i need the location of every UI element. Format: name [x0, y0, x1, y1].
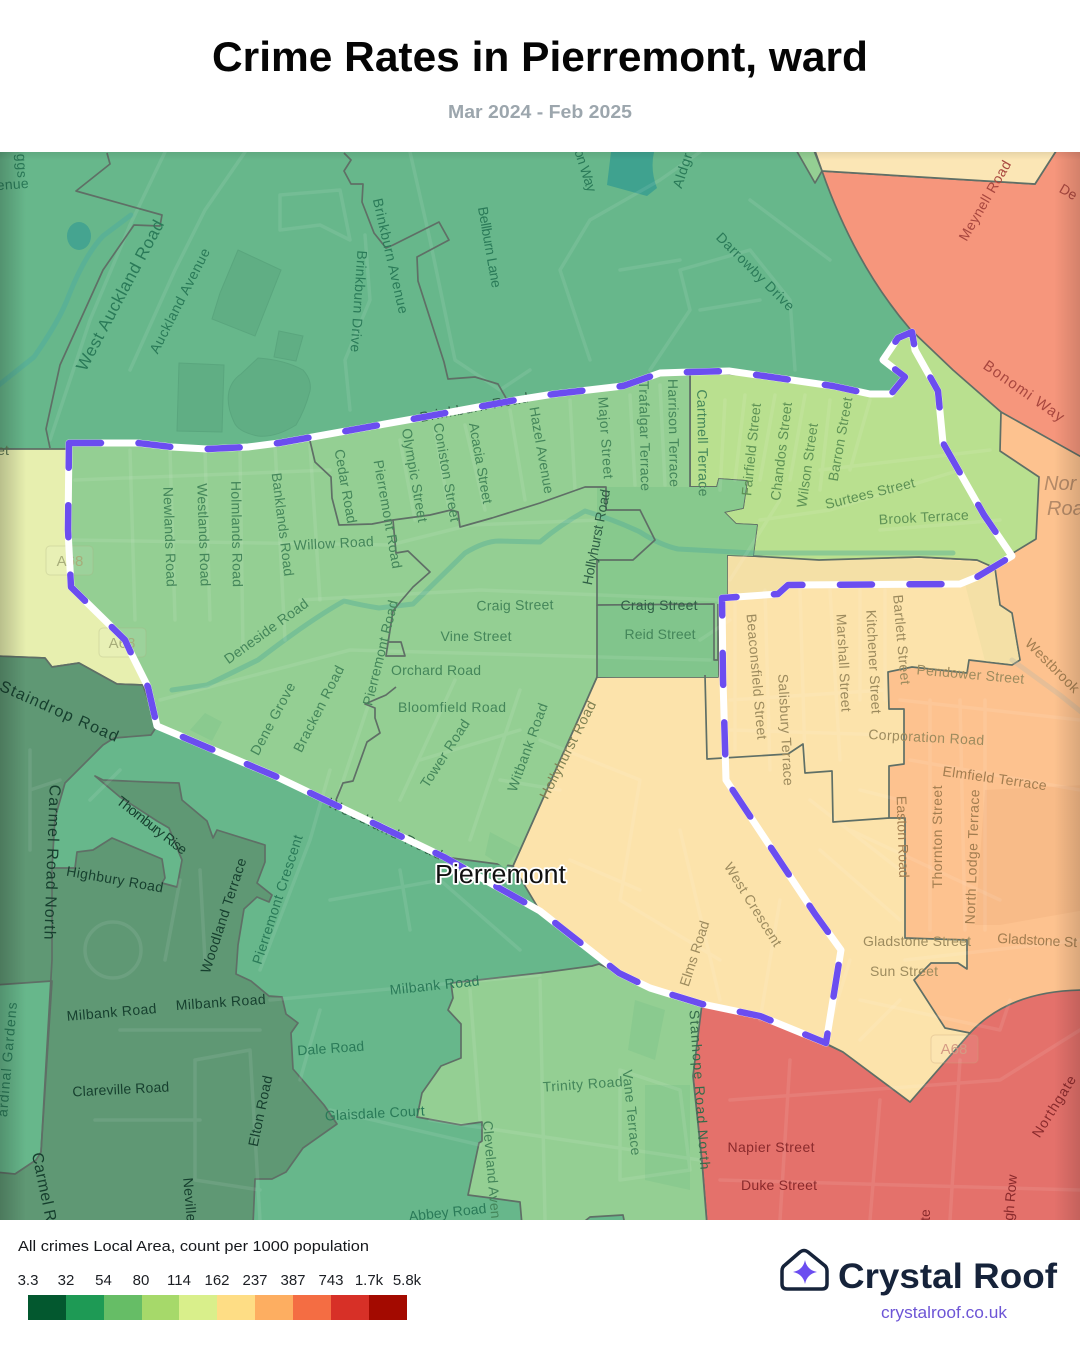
legend: scale labels: 114 [167, 1272, 191, 1289]
legend: scale labels: 162 [204, 1272, 230, 1289]
street labels: yellow zone: Gladstone Street [863, 933, 971, 949]
legend: scale labels: 743 [318, 1272, 344, 1289]
legend: scale labels: 32 [58, 1272, 74, 1289]
pond north [607, 152, 657, 196]
A68 road shields [46, 546, 978, 1063]
street labels: lighter green east [738, 396, 969, 527]
street network [30, 152, 1080, 1220]
street labels: yellow zone: Sun Street [870, 963, 938, 979]
street labels: lighter green east: Barron Street [825, 396, 855, 482]
street labels: ward light green: Cedar Road [332, 448, 360, 524]
street labels: lighter green east: Wilson Street [793, 422, 821, 509]
street labels: ward light green: Bracken Road [290, 663, 347, 755]
street labels: dark green zone: Milbank Road [175, 991, 266, 1013]
street labels: ward light green: Craig Street [476, 596, 554, 614]
street labels: mid green north: iggs [14, 150, 30, 178]
street labels: yellow zone: Kitchener Street [863, 609, 885, 714]
street labels: ward light green: Tower Road [417, 716, 473, 790]
street labels: ward light green: Stanhope Road North [686, 1009, 714, 1170]
street labels: ward light green: Vine Street [440, 628, 512, 644]
street labels: ward light green: Cartmell Terrace [694, 389, 712, 497]
street labels: ward light green: Pierremont Road [359, 598, 401, 707]
zone: red south east [693, 990, 1080, 1225]
area label: Pierremont: Pierremont [435, 861, 566, 889]
street labels: ward light green: Deneside Road [221, 595, 311, 667]
street labels: dark green zone: Elton Road [245, 1074, 275, 1148]
zone: yellow south of ward [513, 555, 1020, 1102]
street labels: mid green north: Glaisdale Court [324, 1102, 425, 1124]
street labels: orange zone: Thornton Street [929, 785, 945, 888]
street labels: yellow zone: Bartlett Street [890, 594, 914, 685]
street labels: orange zone: North Lodge Terrace [962, 789, 982, 925]
street labels: ward light green: Bloomfield Road [398, 699, 506, 715]
street labels: yellow zone: Pendower Street [916, 661, 1025, 687]
street labels: ward light green: Orchard Road [391, 662, 481, 678]
shield: A68 south-east: A68 [941, 1041, 967, 1058]
legend: scale labels: 3.3 [18, 1272, 38, 1289]
zone: Trinity Road light green [417, 964, 707, 1225]
street labels: ward light green: Pierremont Road [370, 459, 405, 570]
legend: scale labels: 5.8k [393, 1272, 422, 1289]
street labels: mid green north: on Way [571, 147, 600, 194]
legend title: All crimes Local Area, count per 1000 population [18, 1238, 369, 1255]
street labels: salmon and red zones [728, 158, 1080, 1221]
zone: dark green south west [0, 656, 337, 1225]
street labels: dark green zone: Staindrop Road [0, 678, 121, 746]
street labels: lighter green east: Chandos Street [767, 401, 795, 501]
street labels: mid green north: West Auckland Road [72, 217, 168, 374]
street labels: orange zone: Gladstone St [997, 930, 1078, 950]
zone: light green ward west [69, 372, 757, 866]
river and ponds [0, 215, 1080, 715]
street labels: ward light green [160, 379, 714, 1219]
street labels: salmon and red zones: De [1057, 180, 1080, 203]
street labels: mid green north: Brinkburn Avenue [370, 197, 412, 315]
street labels: mid green north: Bellburn Lane [475, 205, 505, 289]
legend: scale labels: 54 [95, 1272, 112, 1289]
zone: salmon north east [822, 148, 1080, 459]
street labels: ward light green: Trafalgar Terrace [636, 381, 654, 491]
zone: green wedge north [796, 152, 823, 184]
street labels: ward light green: Acacia Street [466, 421, 496, 505]
street labels: dark green zone: Woodland Terrace [197, 856, 249, 975]
zone: tinted yellow above ward line [722, 557, 1019, 664]
legend: scale labels: 387 [280, 1272, 306, 1289]
legend: colour bar [28, 1295, 407, 1320]
street labels: ward light green: Holmlands Road [228, 481, 246, 587]
brand name: Crystal Roof [838, 1257, 1057, 1296]
zone: Reid Street green [597, 604, 718, 677]
street labels: ward light green: Coniston Street [430, 422, 464, 523]
street labels: ward light green: Olympic Street [399, 427, 431, 523]
shield: A68 south-west: A68 [109, 635, 135, 652]
street labels: ward light green: Westlands Road [194, 483, 214, 587]
street labels: ward light green: Vane Terrace [620, 1069, 644, 1156]
street labels: ward light green: Dene Grove [247, 679, 299, 758]
legend: scale labels: 1.7k [355, 1272, 384, 1289]
street labels: dark green zone: Milbank Road [66, 1000, 157, 1024]
street labels: salmon and red zones: gh Row [1000, 1173, 1020, 1221]
zone: Cardinal Gardens green strip [0, 981, 52, 1174]
street labels: mid green north: Abbey Road [408, 1200, 487, 1224]
street labels: yellow zone: Salisbury Terrace [775, 673, 797, 786]
street labels: orange zone: Easton Road [894, 796, 912, 878]
street labels: dark lines text: Brinkburn Road [419, 389, 530, 425]
street labels: salmon and red zones: Northgate [1028, 1072, 1079, 1140]
shield: A68 west [46, 546, 93, 575]
map edge shading [0, 152, 1080, 1220]
street labels: dark green zone: Carmel Road North [40, 784, 63, 940]
street labels: ward light green: Cleveland Aven [480, 1120, 504, 1219]
zone: orange east [888, 413, 1080, 1032]
zone: pale yellow north [814, 148, 1058, 184]
street labels: dark lines text: Hollyhurst Road [579, 488, 613, 586]
street labels: lighter green east: Brook Terrace [878, 507, 969, 527]
street labels: yellow zone: Elms Road [676, 919, 712, 988]
street labels: mid green north [0, 147, 798, 1224]
title: Crime Rates in Pierremont, ward [212, 33, 868, 80]
street labels: mid green north: Brinkburn Drive [347, 250, 371, 353]
street labels: salmon and red zones: Napier Street [728, 1139, 815, 1155]
street labels: dark lines text: Woodland Road [325, 794, 445, 863]
legend: scale labels: 80 [133, 1272, 149, 1289]
street labels: orange zone [894, 473, 1080, 950]
street labels: ward light green: Witbank Road [504, 701, 551, 794]
street labels: dark green zone: Highbury Road [65, 863, 165, 895]
street labels: yellow zone: Hollyhurst Road [536, 698, 599, 801]
shield: A68 south-east [931, 1035, 978, 1063]
choropleth map [0, 147, 1080, 1225]
street labels: mid green north: Milbank Road [389, 972, 480, 998]
street labels: salmon and red zones: Duke Street [741, 1177, 817, 1193]
street labels: ward light green: Hazel Avenue [526, 405, 557, 495]
legend: scale labels: 237 [242, 1272, 268, 1289]
shield: A68 west: A68 [57, 553, 83, 570]
zone: orange park [975, 785, 1080, 925]
street labels: yellow zone [536, 594, 1025, 988]
street labels: lighter green east: Fairfield Street [738, 402, 764, 497]
street labels: orange zone: Elmfield Terrace [942, 763, 1048, 793]
street labels: ward light green: Banklands Road [269, 472, 297, 577]
street labels: ward light green: Major Street [595, 396, 617, 479]
sports fields north [177, 250, 310, 436]
street labels: mid green north: Pierremont Crescent [249, 833, 306, 966]
street labels: dark lines text: Craig Street [620, 597, 698, 613]
zone: mid-light green central [597, 479, 757, 605]
street labels: ward light green: Newlands Road [160, 487, 180, 587]
map base: mid green area [0, 152, 909, 1220]
shield: A68 south-west [99, 628, 146, 657]
street labels: salmon and red zones: Bonomi Way [980, 357, 1068, 426]
street labels: mid green north: Dale Road [297, 1038, 365, 1058]
street labels: ward light green: Harrison Terrace [665, 379, 683, 487]
legend: scale labels [18, 1272, 422, 1289]
street labels: dark green zone: Clareville Road [72, 1078, 170, 1100]
street labels: dark green zone: Neville [180, 1177, 200, 1222]
street labels: lighter green east: Surtees Street [823, 474, 916, 512]
street labels: dark green zone: Carmel R [28, 1151, 59, 1223]
street labels: ward light green: Reid Street [624, 626, 696, 642]
zone: small green patch south [585, 1214, 625, 1220]
website url: crystalroof.co.uk [881, 1304, 1008, 1322]
street labels: yellow zone: Beaconsfield Street [744, 613, 770, 740]
pond west [67, 222, 91, 250]
street labels: orange zone: Nor [1044, 473, 1078, 495]
street labels: mid green north: Aldgr [669, 151, 696, 190]
street labels: mid green north: Auckland Avenue [146, 245, 213, 356]
street labels: dark lines text [325, 389, 698, 863]
street labels: salmon and red zones: Meynell Road [955, 158, 1014, 243]
street labels: ward light green: Willow Road [293, 533, 374, 553]
street labels: yellow zone: Corporation Road [868, 726, 985, 748]
street labels: dark green zone: Thornbury Rise [114, 793, 191, 858]
zone: lighter green east of ward [690, 329, 1039, 568]
street labels: salmon and red zones: te [917, 1209, 933, 1221]
street labels: mid green north: Darrowby Drive [713, 229, 798, 314]
icon: Crystal Roof house logo [782, 1250, 827, 1289]
ward internal boundaries [41, 153, 889, 1152]
street labels: yellow zone: West Crescent [721, 859, 786, 949]
subtitle: date range: Mar 2024 - Feb 2025 [448, 102, 632, 122]
zone: pale yellow-green west [0, 449, 148, 687]
street labels: yellow zone: Marshall Street [833, 613, 855, 712]
park patches [190, 713, 690, 1190]
ward boundary: white dashed purple outline [68, 332, 1012, 1043]
street labels: ward light green: Trinity Road [542, 1073, 623, 1095]
street labels: dark green zone [0, 678, 275, 1223]
